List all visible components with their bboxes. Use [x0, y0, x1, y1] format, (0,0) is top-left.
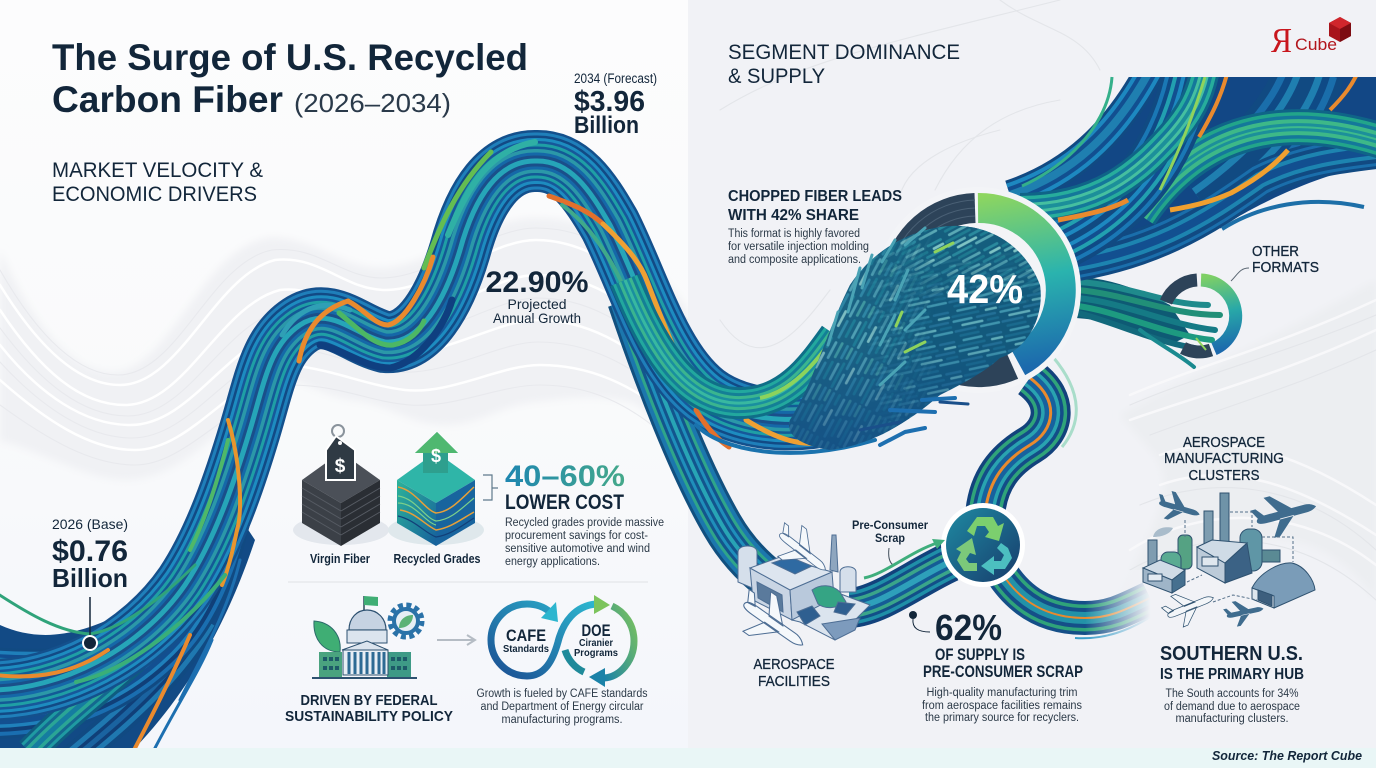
icon: recycled grades cube with arrow: $ [431, 446, 441, 466]
label: other formats [1231, 243, 1319, 281]
callout: lower cost: LOWER COST [505, 491, 624, 514]
arrow: scrap flow [864, 539, 945, 578]
heading: segment dominance [728, 41, 960, 88]
labels: CAFE and DOE: Ciranier [579, 637, 613, 649]
text: policy description [476, 688, 648, 726]
stat: southern U.S. hub: of demand due to aerospace [1164, 701, 1300, 713]
recycling hub icon [941, 503, 1025, 587]
icon: capitol building with leaf and gear [312, 596, 422, 678]
stat: southern U.S. hub [1160, 643, 1304, 725]
bracket [483, 475, 498, 500]
donut chart: other formats [1166, 280, 1236, 352]
fiber bundle: other formats strands [1076, 277, 1220, 367]
icon: manufacturing cluster [1143, 485, 1321, 632]
labels: cube comparison: Virgin Fiber [310, 551, 370, 566]
icon: CAFE and DOE loops [491, 595, 634, 687]
labels: CAFE and DOE: Standards [503, 643, 549, 655]
callout: lower cost: Recycled grades provide massive [505, 517, 664, 529]
logo: RCube: Я [1271, 21, 1292, 60]
callout: lower cost [505, 460, 664, 568]
label: pre-consumer scrap: Scrap [875, 531, 905, 545]
callout: lower cost: energy applications. [505, 556, 600, 568]
stat: 2026 base: 2026 (Base) [52, 516, 128, 532]
thin green strand above bundle [1022, 77, 1112, 186]
heading: aerospace manufacturing clusters: AEROSPACE [1183, 434, 1265, 451]
strand bundle: branch to aerospace facilities [608, 306, 776, 591]
label: pre-consumer scrap: Pre-Consumer [852, 518, 928, 532]
heading: segment dominance: SEGMENT DOMINANCE [728, 41, 960, 64]
donut chart: chopped fiber 42% share [875, 187, 1081, 393]
stat: southern U.S. hub: SOUTHERN U.S. [1160, 643, 1303, 665]
strand bundle: lower left strands [0, 526, 250, 748]
stat: southern U.S. hub: The South accounts for 34% [1166, 688, 1298, 700]
heading: market velocity [52, 159, 263, 206]
label: aerospace facilities: AEROSPACE [754, 656, 834, 673]
icon: aerospace facility [728, 516, 870, 664]
loose chopped fibers [828, 228, 968, 445]
text: chopped fiber leads: This format is highly favored [728, 228, 860, 240]
fiber bundle: chopped fiber to recycling hub [985, 357, 1076, 515]
stat: 2034 forecast: 2034 (Forecast) [574, 71, 657, 86]
stat: 62% supply [909, 607, 1083, 724]
arrow: policy to programs [437, 635, 475, 645]
stat: southern U.S. hub: manufacturing clusters. [1176, 713, 1288, 725]
text: chopped fiber leads: WITH 42% SHARE [728, 207, 859, 224]
callout: lower cost: procurement savings for cost- [505, 530, 648, 542]
text: chopped fiber leads: CHOPPED FIBER LEADS [728, 188, 902, 205]
labels: CAFE and DOE: DOE [582, 621, 610, 640]
label: other formats: FORMATS [1252, 259, 1319, 276]
heading: segment dominance: & SUPPLY [728, 65, 825, 88]
text: chopped fiber leads: and composite applications. [728, 254, 861, 266]
stat: 2026 base [52, 516, 128, 593]
label: pre-consumer scrap [852, 518, 928, 565]
stat: 42%: 42% [947, 266, 1023, 312]
label: other formats: OTHER [1252, 243, 1299, 260]
stat: annual growth: Annual Growth [493, 310, 581, 326]
base marker line and dot [83, 597, 97, 650]
heading: federal policy: SUSTAINABILITY POLICY [285, 708, 453, 725]
logo: RCube: Cube [1295, 35, 1337, 54]
fiber bundle: recycling hub to Southern U.S. [1003, 570, 1167, 655]
logo: RCube [1271, 17, 1351, 60]
heading: aerospace manufacturing clusters [1164, 434, 1284, 484]
strand bundle: main ribbon [0, 161, 880, 690]
fiber bundle: main market growth stream [0, 142, 880, 768]
stat: 62% supply: PRE-CONSUMER SCRAP [923, 662, 1083, 681]
title: Carbon Fiber [52, 79, 283, 120]
heading: market velocity: MARKET VELOCITY & [52, 159, 263, 182]
labels: cube comparison [310, 551, 480, 566]
stat: annual growth [486, 266, 588, 326]
fiber bundle: facility to recycling hub [850, 562, 950, 608]
stat: 2034 forecast: Billion [574, 112, 639, 139]
label: aerospace facilities [754, 656, 834, 690]
title: (2026–2034) [294, 88, 451, 118]
heading: aerospace manufacturing clusters: CLUSTERS [1188, 467, 1260, 484]
labels: CAFE and DOE [503, 621, 618, 659]
callout: lower cost: sensitive automotive and wind [505, 543, 650, 555]
title: The Surge of U.S. Recycled [52, 37, 528, 78]
labels: CAFE and DOE: CAFE [506, 626, 546, 645]
stat: 2034 forecast: $3.96 [574, 86, 645, 118]
heading: federal policy [285, 692, 453, 725]
text: chopped fiber leads [728, 188, 902, 266]
source note: Source: The Report Cube [1212, 748, 1362, 763]
stat: 2026 base: $0.76 [52, 535, 128, 568]
text: policy description: Growth is fueled by CAFE standards [476, 688, 648, 700]
chopped fiber blob [789, 226, 1041, 450]
icon: recycled grades cube with arrow [388, 432, 484, 546]
labels: cube comparison: Recycled Grades [394, 551, 480, 566]
heading: federal policy: DRIVEN BY FEDERAL [300, 692, 438, 709]
stat: 62% supply: from aerospace facilities remains [922, 700, 1082, 712]
title [52, 37, 528, 120]
strand accents: green, teal and orange fibers [0, 142, 875, 750]
icon: virgin fiber cube with price tag: $ [335, 456, 346, 477]
text: chopped fiber leads: for versatile injection molding [728, 241, 869, 253]
stat: southern U.S. hub: IS THE PRIMARY HUB [1160, 666, 1304, 683]
stat: 62% supply: OF SUPPLY IS [935, 645, 1025, 664]
label: aerospace facilities: FACILITIES [758, 673, 830, 690]
stat: 2026 base: Billion [52, 563, 128, 593]
text: policy description: and Department of Energy circular [480, 701, 644, 713]
stat: 2034 forecast [574, 71, 657, 139]
recycling arrows [956, 517, 1012, 575]
labels: CAFE and DOE: Programs [574, 647, 618, 659]
stat: 62% supply: the primary source for recyclers. [925, 712, 1079, 724]
icon: virgin fiber cube with price tag [293, 425, 389, 546]
strand bundle: teal arc into chopped fiber [625, 280, 835, 403]
text: policy description: manufacturing programs. [502, 714, 622, 726]
stat: 62% supply: High-quality manufacturing trim [926, 687, 1078, 699]
fiber bundle: upper right strands [1010, 70, 1376, 273]
stat: annual growth: Projected [508, 296, 566, 312]
callout: lower cost: 40–60% [505, 460, 625, 493]
strand base: lower left fan [0, 530, 255, 748]
heading: aerospace manufacturing clusters: MANUFACTURING [1164, 450, 1284, 467]
heading: market velocity: ECONOMIC DRIVERS [52, 183, 257, 206]
stat: annual growth: 22.90% [486, 266, 588, 299]
stat: 62% supply: 62% [935, 607, 1002, 648]
